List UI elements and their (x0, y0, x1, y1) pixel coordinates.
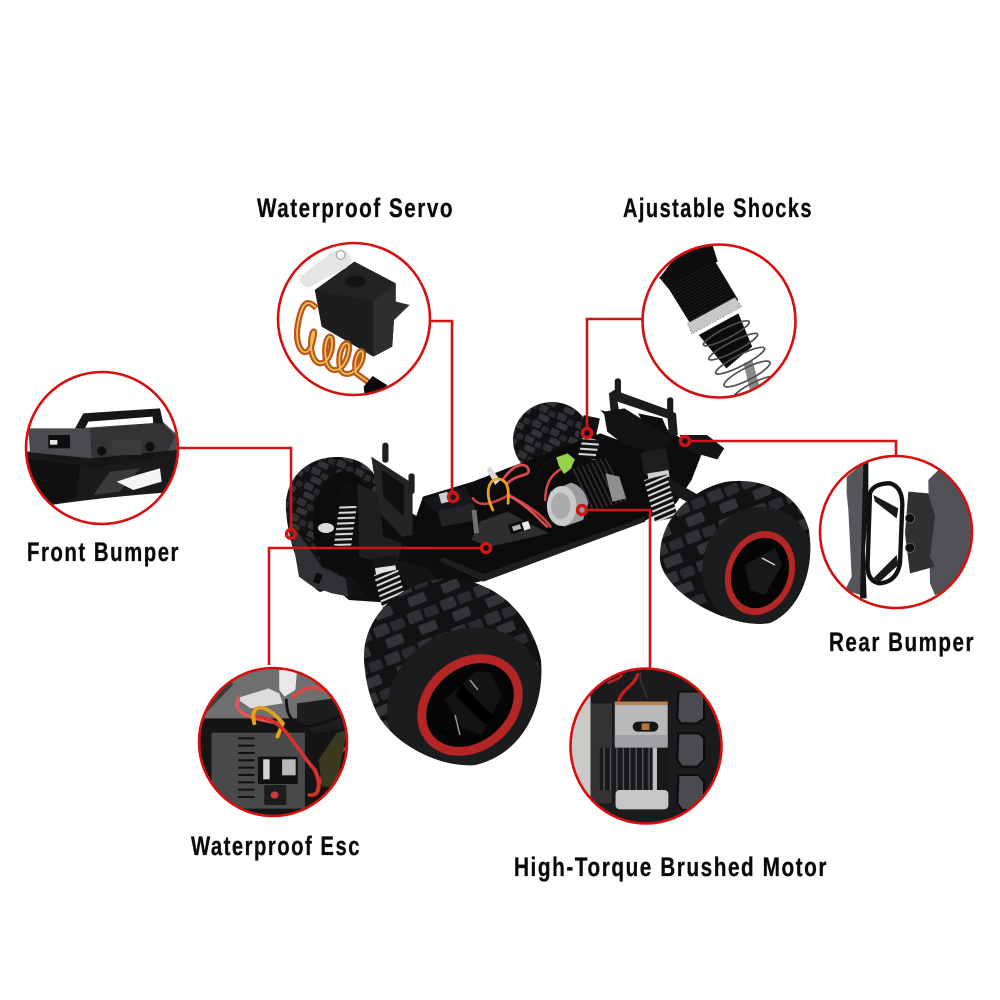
rear far shock (578, 415, 600, 460)
leader: rear bumper (680, 436, 896, 456)
rear towers and body mount (604, 378, 724, 485)
servo body (315, 262, 409, 357)
bumper lower structure (27, 448, 180, 507)
rear main tire (660, 480, 810, 624)
front main tire (364, 579, 542, 766)
callout: adjustable shocks (642, 244, 796, 404)
motor can (547, 483, 588, 527)
esc button (264, 785, 286, 805)
front suspension tower (357, 443, 415, 567)
leader: waterproof esc (269, 544, 490, 665)
motor wires (618, 673, 638, 702)
callout: front bumper (26, 372, 180, 524)
esc ribs (238, 737, 255, 798)
RC truck chassis illustration (286, 378, 810, 766)
leader lines and markers (179, 319, 896, 669)
rear bumper left plate (846, 464, 864, 595)
front suspension mass (314, 483, 483, 603)
servo connector (363, 376, 387, 393)
callout: high-torque brushed motor (569, 667, 723, 825)
callout: waterproof esc (198, 666, 348, 818)
connector plug (279, 670, 297, 697)
rear tire red beadlock rim (713, 521, 807, 625)
main chassis tray (413, 433, 657, 582)
heat sink fins (569, 457, 628, 512)
rear near shock (640, 448, 678, 522)
esc body (211, 733, 305, 809)
rear bumper mount (905, 492, 935, 573)
rear bumper screws (905, 514, 915, 523)
spring coils (702, 320, 771, 395)
wires (237, 688, 352, 795)
green connector (556, 453, 575, 474)
upper area (204, 669, 332, 718)
shock rod (744, 360, 759, 390)
motor fins (600, 748, 668, 790)
far rear tire (513, 402, 591, 478)
ESC housing (471, 512, 549, 547)
callout: rear bumper (820, 456, 975, 608)
front bumper (290, 527, 349, 597)
leader: front bumper (179, 448, 296, 538)
near-side front tire (left) (286, 457, 380, 592)
chassis and electronics (290, 378, 724, 611)
bumper left linkages (27, 458, 80, 505)
bumper bar (75, 408, 163, 428)
servo arm (300, 249, 352, 287)
bumper details (126, 453, 142, 455)
bumper face (28, 422, 177, 458)
label: waterproof esc: Waterproof Esc (191, 831, 361, 861)
label: waterproof servo: Waterproof Servo (257, 193, 454, 223)
callout: waterproof servo (278, 243, 430, 397)
label: adjustable shocks: Ajustable Shocks (623, 193, 813, 223)
front near shock (372, 555, 407, 611)
lower shock body (699, 313, 752, 368)
motor can (615, 702, 668, 745)
rear bumper hoop (868, 483, 902, 583)
suspension arm to rear (659, 477, 698, 503)
front tire red beadlock rim (397, 633, 543, 777)
label: front bumper: Front Bumper (27, 537, 180, 567)
front arm (397, 560, 442, 600)
front far shock (334, 482, 357, 548)
servo coiled wire (297, 303, 370, 383)
servo housing (423, 467, 500, 533)
rear bumper right plate (928, 470, 975, 595)
leader: waterproof servo (431, 321, 458, 502)
wiring (473, 459, 562, 527)
circuit board (319, 730, 347, 787)
esc label (258, 757, 298, 784)
motor frame dark (590, 670, 720, 822)
leader: motor (578, 506, 650, 669)
threaded shock body (659, 260, 738, 323)
label: high-torque brushed motor: High-Torque Brushed Motor (514, 852, 828, 882)
esc dark frame (201, 717, 354, 817)
motor frame windows (677, 692, 704, 810)
silver adjuster ring (687, 297, 742, 334)
leader: adjustable shocks (582, 319, 642, 438)
rear suspension mass (600, 410, 702, 521)
